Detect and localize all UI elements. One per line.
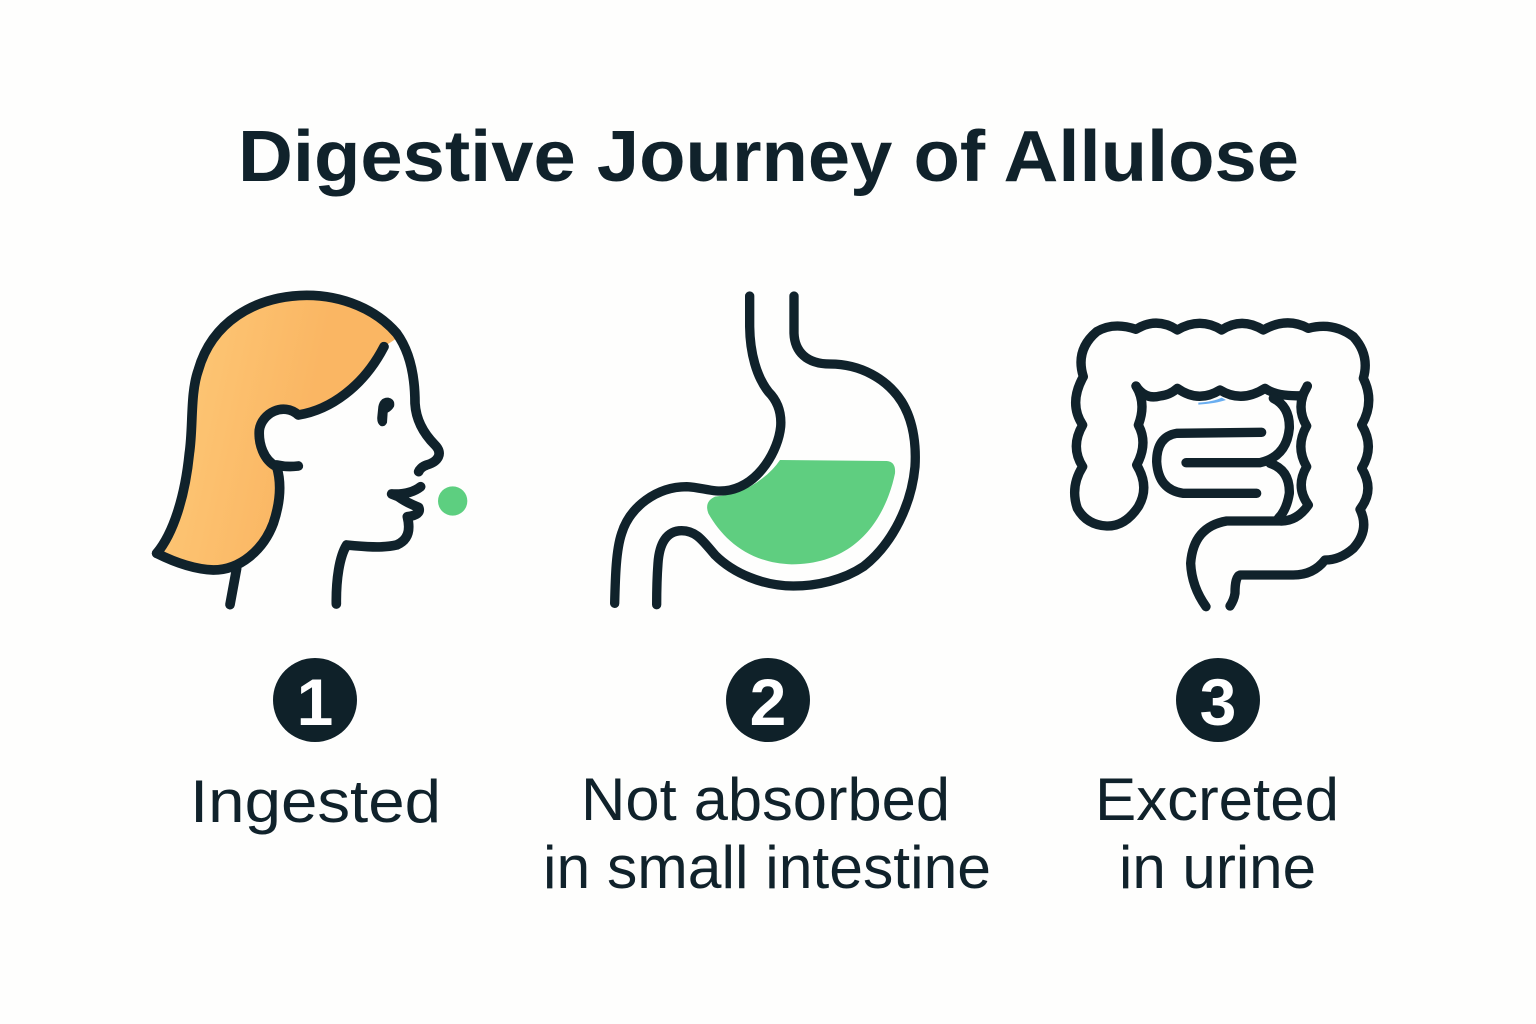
step number 1: [273, 658, 357, 742]
panel: step 3 excreted: [1075, 323, 1369, 901]
label: Excreted in urine: in urine: [1119, 834, 1316, 901]
title: Digestive Journey of Allulose: [238, 117, 1299, 197]
icon: intestines: [1075, 323, 1369, 607]
step number 3: 3: [1200, 665, 1236, 739]
label: Excreted in urine: [1095, 766, 1339, 901]
label: Not absorbed in small intestine: Not absorbed: [581, 766, 950, 833]
step number 2: 2: [750, 665, 786, 739]
panel: step 1 ingested: [157, 295, 467, 835]
step number 3: [1176, 658, 1260, 742]
panel: step 2 not absorbed: [543, 296, 991, 901]
label: Not absorbed in small intestine: in small intestine: [543, 834, 991, 901]
step number 2: [726, 658, 810, 742]
step number 1: 1: [297, 665, 333, 739]
icon: head in profile with green dot: [157, 295, 467, 605]
label: Excreted in urine: Excreted: [1095, 766, 1339, 833]
label: Ingested: Ingested: [190, 768, 441, 835]
icon: stomach with green fill: [615, 296, 915, 605]
label: Not absorbed in small intestine: [543, 766, 991, 901]
